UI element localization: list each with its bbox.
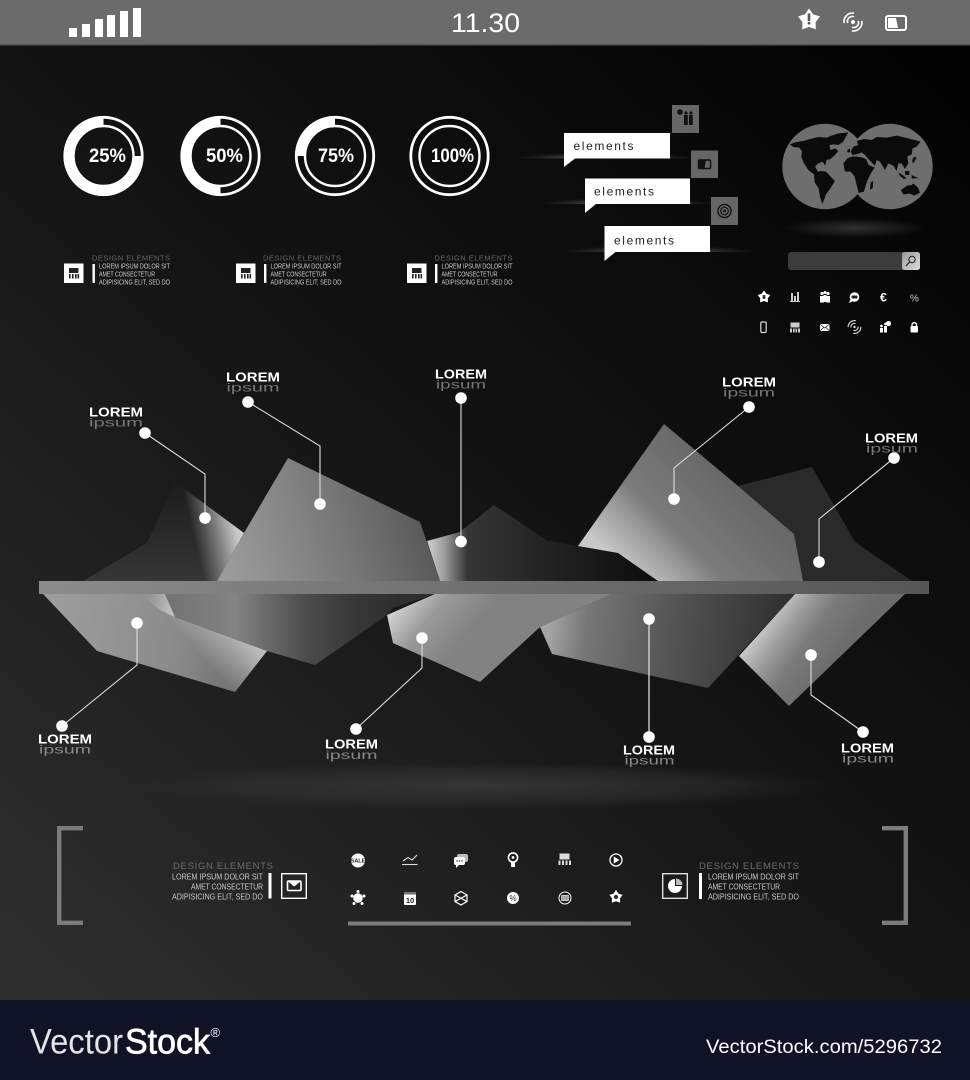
brand logo text: Stock xyxy=(125,1022,210,1062)
right text block xyxy=(663,861,799,902)
caption 2: ADIPISICING ELIT, SED DO xyxy=(270,279,342,286)
icon: kiosk xyxy=(790,322,800,332)
callout 5 xyxy=(813,432,918,568)
icon: wireless xyxy=(847,319,862,335)
icon: line chart xyxy=(402,855,418,864)
callout 7: ipsum xyxy=(326,748,378,762)
callout 4 xyxy=(668,376,776,505)
left text block: LOREM IPSUM DOLOR SIT xyxy=(172,872,263,882)
callout 7: LOREM xyxy=(325,738,378,752)
reflection: dark wave xyxy=(165,594,435,665)
icon: speech xyxy=(849,292,859,303)
brand logo text xyxy=(30,1022,220,1062)
icon: star badge xyxy=(609,890,623,903)
bubble 2 with icon xyxy=(537,150,718,213)
icon: sale tag: SALE xyxy=(351,858,366,864)
right text block: ADIPISICING ELIT, SED DO xyxy=(708,892,799,902)
bubble 3 with icon: elements xyxy=(614,234,674,248)
callout 6: ipsum xyxy=(39,742,91,756)
icon: bar chart xyxy=(790,292,800,302)
callout 4: LOREM xyxy=(722,376,776,390)
islands xyxy=(898,172,907,179)
icon: kiosk xyxy=(558,854,571,865)
polygon mountains below platform xyxy=(43,594,905,706)
icon: battery xyxy=(886,16,906,30)
callout 8 xyxy=(623,613,675,768)
icon: gear star xyxy=(350,890,366,905)
icon grid top right xyxy=(758,290,919,335)
caption 3: LOREM IPSUM DOLOR SIT xyxy=(442,264,513,270)
icon: percent: % xyxy=(910,294,919,304)
left bracket xyxy=(59,828,83,923)
caption 1: LOREM IPSUM DOLOR SIT xyxy=(99,264,171,270)
icon: percent badge: % xyxy=(509,894,517,903)
bottom panel xyxy=(59,828,906,926)
caption 2 xyxy=(236,254,342,286)
signal strength bars xyxy=(69,8,141,37)
icon: sale tag xyxy=(351,854,366,868)
right text block: AMET CONSECTETUR xyxy=(708,882,780,892)
reflection: center right xyxy=(540,594,795,688)
icon: phone xyxy=(761,322,766,332)
left text block: DESIGN ELEMENTS xyxy=(173,861,273,872)
donut 100%: 100% xyxy=(431,146,474,167)
donut 75% xyxy=(296,117,374,195)
icon: padlock xyxy=(910,323,918,332)
callout 1: ipsum xyxy=(89,416,143,430)
donut 50%: 50% xyxy=(206,146,243,167)
bubble 1 with icon xyxy=(513,105,699,167)
donut 75%: 75% xyxy=(318,146,354,167)
right text block: DESIGN ELEMENTS xyxy=(699,861,799,872)
callout 4: ipsum xyxy=(723,386,775,400)
progress donuts xyxy=(65,117,488,195)
caption 3: DESIGN ELEMENTS xyxy=(434,254,512,262)
icon: people xyxy=(672,105,699,133)
callout 9: LOREM xyxy=(841,742,894,756)
clock: 11.30 xyxy=(451,8,520,38)
icon grid bottom xyxy=(350,853,623,905)
speech bubbles xyxy=(513,105,757,261)
callout 9: ipsum xyxy=(842,752,894,766)
left text block: AMET CONSECTETUR xyxy=(191,882,263,892)
callout leader lines xyxy=(38,368,918,768)
status bar xyxy=(0,0,970,46)
search bar xyxy=(788,252,920,270)
icon: target xyxy=(711,197,738,225)
icon: calendar xyxy=(404,892,416,905)
bubble 3 with icon xyxy=(560,197,757,261)
callout 2: ipsum xyxy=(226,380,280,394)
icon: hexagon box xyxy=(455,892,467,905)
footer watermark band xyxy=(0,1000,970,1080)
callout 3 xyxy=(435,368,487,547)
bubble 1 with icon: elements xyxy=(574,139,634,153)
icon: speech list xyxy=(559,892,571,904)
icon: people with badge xyxy=(880,321,891,332)
mountain: back right dark xyxy=(738,467,912,581)
donut 50% xyxy=(182,117,259,195)
left text block xyxy=(172,861,306,902)
mountain: main right gray xyxy=(578,424,803,581)
left text block: ADIPISICING ELIT, SED DO xyxy=(172,892,263,902)
callout 5: ipsum xyxy=(866,442,918,456)
icon: wireless signal xyxy=(842,11,864,33)
callout 2: LOREM xyxy=(226,370,280,384)
icon: euro: € xyxy=(880,290,887,304)
callout 8: ipsum xyxy=(624,754,674,768)
icon: envelope xyxy=(820,324,830,331)
brand logo text: Vector xyxy=(30,1022,123,1062)
icon: alert star xyxy=(798,8,820,29)
url text: VectorStock.com/5296732 xyxy=(706,1036,942,1058)
caption 1: AMET CONSECTETUR xyxy=(99,272,155,278)
reflection: center gray xyxy=(387,594,612,682)
mountain: back left dark xyxy=(83,482,244,581)
donut 100% xyxy=(411,117,488,195)
mountain: center dark xyxy=(427,505,658,581)
brand logo text: ® xyxy=(210,1025,220,1040)
callout 1: LOREM xyxy=(89,406,143,420)
world map xyxy=(782,124,933,209)
callout 9 xyxy=(805,649,894,766)
right bracket xyxy=(882,828,906,923)
donut 25%: 25% xyxy=(89,146,126,167)
north america xyxy=(790,132,848,174)
callout 6: LOREM xyxy=(38,732,92,746)
africa xyxy=(843,156,875,193)
callout 3: ipsum xyxy=(436,378,486,392)
right text block: LOREM IPSUM DOLOR SIT xyxy=(708,872,799,882)
caption 2: LOREM IPSUM DOLOR SIT xyxy=(270,264,342,270)
callout 6 xyxy=(38,617,143,756)
donut 25% xyxy=(65,117,142,195)
caption 1 xyxy=(64,254,171,286)
icon: battery card xyxy=(691,150,718,178)
callout 3: LOREM xyxy=(435,368,487,382)
divider bar under icons xyxy=(348,922,631,926)
icon: light bulb xyxy=(508,853,518,867)
icon: envelope box xyxy=(282,874,306,898)
icon: star xyxy=(758,290,770,302)
reflection: right gray xyxy=(739,594,905,706)
caption 2: DESIGN ELEMENTS xyxy=(263,254,341,262)
icon: people xyxy=(820,291,830,302)
eurasia xyxy=(851,136,921,171)
icon: play button xyxy=(610,854,622,866)
caption 1: DESIGN ELEMENTS xyxy=(92,254,170,262)
caption 2: AMET CONSECTETUR xyxy=(270,272,326,278)
icon: calendar: 10 xyxy=(406,896,414,905)
caption 3: ADIPISICING ELIT, SED DO xyxy=(442,279,513,286)
mountain: main left gray xyxy=(217,458,440,581)
callout 1 xyxy=(89,406,211,524)
design element captions under donuts xyxy=(64,254,513,286)
callout 8: LOREM xyxy=(623,744,675,758)
map shadow xyxy=(783,218,927,238)
icon: pie chart box xyxy=(663,874,687,898)
caption 1: ADIPISICING ELIT, SED DO xyxy=(99,279,170,286)
ground reflection glow xyxy=(125,762,835,810)
platform xyxy=(39,581,929,594)
caption 3: AMET CONSECTETUR xyxy=(442,272,498,278)
south america xyxy=(814,171,835,204)
reflection: left gray xyxy=(43,594,267,692)
callout 2 xyxy=(226,370,326,510)
callout 5: LOREM xyxy=(865,432,918,446)
bubble 2 with icon: elements xyxy=(594,184,654,198)
polygon mountains above platform xyxy=(83,424,912,581)
caption 3 xyxy=(407,254,513,286)
callout 7 xyxy=(325,632,428,762)
australia xyxy=(901,183,920,196)
icon: percent badge xyxy=(507,892,519,904)
icon: chat bubbles xyxy=(454,854,468,868)
